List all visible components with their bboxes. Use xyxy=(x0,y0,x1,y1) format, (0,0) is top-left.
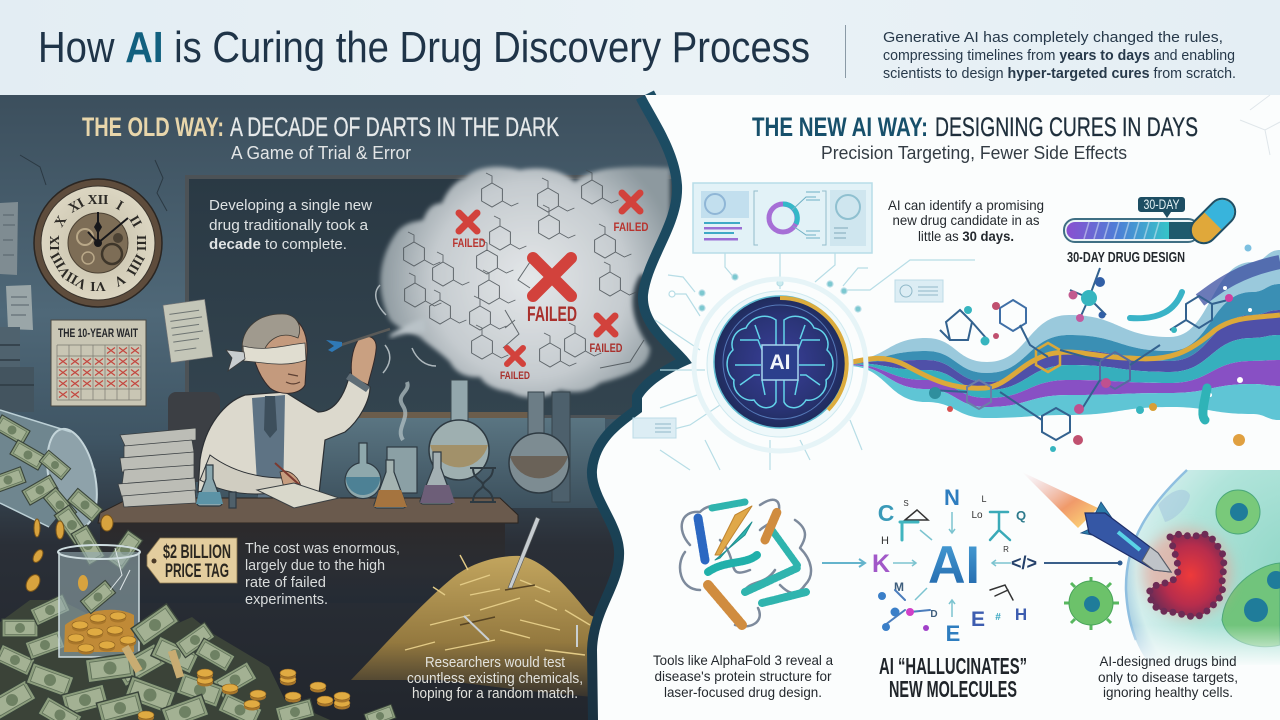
text: alphafold: laser-focused drug design. xyxy=(664,684,822,700)
text: random search: countless existing chemicals, xyxy=(407,671,583,687)
text: targeted binding xyxy=(1098,653,1238,700)
panel: the old way xyxy=(0,95,700,720)
text: a decade to develop xyxy=(209,197,372,253)
icon: wall clock: IIII xyxy=(123,251,147,277)
panel: the new AI way xyxy=(597,95,1280,720)
heading: the new AI way: THE NEW AI WAY: xyxy=(752,112,928,142)
flasks and pipes behind desk xyxy=(401,380,570,502)
progress bar: 30-day drug design: 30-DAY DRUG DESIGN xyxy=(1067,249,1185,266)
molecule nodes xyxy=(929,244,1252,452)
generative AI letter cloud: # xyxy=(995,612,1001,623)
diseased target protein xyxy=(1150,534,1224,616)
chemical structures xyxy=(404,170,644,368)
icon: wall clock: VII xyxy=(64,268,90,292)
subheading: trial and error: A Game of Trial & Error xyxy=(231,143,411,163)
failed marker large xyxy=(527,258,577,326)
dashboard xyxy=(693,183,872,253)
generative AI letter cloud: AI xyxy=(928,536,980,595)
text: random search xyxy=(407,655,583,702)
icon: wall clock: I xyxy=(113,198,125,214)
heading: the old way: THE OLD WAY: xyxy=(82,112,224,142)
text: targeted binding: ignoring healthy cells. xyxy=(1103,684,1233,700)
text: a decade to develop: decade to complete. xyxy=(209,236,347,253)
icon: wall clock: VIII xyxy=(48,249,74,279)
subheading: precision targeting: Precision Targeting, Fewer Side Effects xyxy=(821,143,1127,163)
circuit lines xyxy=(650,253,975,470)
inner arrows xyxy=(893,512,1011,617)
text: random search: hoping for a random match. xyxy=(412,686,578,702)
notepad xyxy=(257,483,339,508)
failed marker 1: FAILED xyxy=(452,236,486,250)
failed marker 4 xyxy=(590,316,623,355)
wall papers xyxy=(0,202,213,363)
icon: wall clock: XI xyxy=(66,196,87,217)
icon: capsule xyxy=(1185,193,1241,249)
healthy cells xyxy=(1216,490,1280,647)
icon: 30-day tag xyxy=(1138,197,1185,218)
icon: drug rocket xyxy=(1022,472,1171,572)
text: enormous cost: largely due to the high xyxy=(245,557,385,574)
chip: AI xyxy=(762,345,798,380)
generative AI letter cloud: E xyxy=(946,621,960,646)
text: alphafold xyxy=(653,652,833,700)
filing cabinet xyxy=(0,327,34,412)
paper stacks xyxy=(118,428,196,507)
icon: wall clock: III xyxy=(133,235,148,251)
small flasks xyxy=(196,443,496,508)
generative AI letter cloud: H xyxy=(1015,605,1027,624)
text: targeted binding: only to disease targets, xyxy=(1098,669,1238,685)
icon: 30-day tag: 30-DAY xyxy=(1144,197,1180,212)
generative AI letter cloud: C xyxy=(878,500,894,526)
generative AI letter cloud: H xyxy=(881,535,889,547)
smoke cloud of failed experiments xyxy=(376,167,670,398)
money pile xyxy=(0,594,330,720)
glass beaker with coins xyxy=(58,545,140,657)
molecular structures xyxy=(930,268,1228,440)
icon: wall clock: IX xyxy=(48,235,63,251)
generative AI letter cloud: E xyxy=(971,608,985,631)
calendar: the 10-year wait xyxy=(51,320,146,406)
desk with paper stacks and glassware xyxy=(98,428,518,603)
front money bundles and coins xyxy=(85,604,396,720)
icon: wall clock: V xyxy=(111,271,127,289)
failed marker 2: FAILED xyxy=(614,220,649,234)
scientist xyxy=(168,314,376,503)
header summary text: scientists to design hyper-targeted cures from scratch. xyxy=(883,66,1236,82)
arrow: AI to target xyxy=(1044,560,1122,566)
text: enormous cost: The cost was enormous, xyxy=(245,540,400,557)
failed marker 2 xyxy=(614,193,649,234)
generative AI letter cloud: D xyxy=(930,609,938,620)
tipped jar of money xyxy=(0,410,143,594)
text: enormous cost xyxy=(245,540,400,608)
header summary text xyxy=(883,30,1236,82)
virus-like healthy cell xyxy=(1064,577,1119,630)
header band xyxy=(0,0,1280,95)
generative AI letter cloud xyxy=(872,485,1037,646)
price tag: PRICE TAG xyxy=(165,561,229,582)
icon: wall clock: X xyxy=(52,214,70,230)
icon: dart xyxy=(326,329,390,352)
brain outline xyxy=(727,316,833,408)
text: thirty days: little as 30 days. xyxy=(918,228,1014,244)
heading: a decade of darts in the dark: A DECADE OF DARTS IN THE DARK xyxy=(230,112,559,142)
generative AI letter cloud: Q xyxy=(1016,508,1026,523)
heading: AI hallucinates: NEW MOLECULES xyxy=(889,676,1017,702)
price tag: $2 BILLION xyxy=(163,542,231,563)
text: alphafold: disease's protein structure for xyxy=(654,668,832,684)
text: alphafold: Tools like AlphaFold 3 reveal a xyxy=(653,652,833,668)
text: thirty days: new drug candidate in as xyxy=(892,212,1040,228)
generative AI letter cloud: K xyxy=(872,550,890,578)
failed marker 1 xyxy=(452,213,486,250)
calendar: the 10-year wait: THE 10-YEAR WAIT xyxy=(58,328,138,340)
header summary text: compressing timelines from years to days and enabling xyxy=(883,48,1235,64)
AI brain core xyxy=(694,279,866,451)
failed marker large: FAILED xyxy=(527,303,577,326)
text: targeted binding: AI-designed drugs bind xyxy=(1100,653,1236,669)
generative AI letter cloud: N xyxy=(944,485,960,510)
icon: wall clock xyxy=(34,179,162,307)
generative AI letter cloud: </> xyxy=(1011,553,1037,573)
generative AI letter cloud: M xyxy=(894,580,904,594)
failed marker 4: FAILED xyxy=(590,341,623,355)
heading: AI hallucinates: AI “HALLUCINATES” xyxy=(879,653,1027,679)
text: enormous cost: rate of failed xyxy=(245,574,326,591)
protein structure xyxy=(680,500,811,626)
icon: wall clock: XII xyxy=(87,193,109,208)
text: a decade to develop: drug traditionally took a xyxy=(209,217,369,234)
arrow: protein to AI xyxy=(822,559,865,567)
haystack with needle xyxy=(351,517,624,700)
text: thirty days xyxy=(888,197,1044,244)
icon: wall clock: VI xyxy=(90,278,106,293)
failed marker 5 xyxy=(500,348,530,382)
small data chips xyxy=(633,280,943,438)
progress bar: 30-day drug design xyxy=(1064,193,1241,266)
icon: wall clock: II xyxy=(126,213,144,230)
generative AI letter cloud: Lo xyxy=(971,510,983,521)
failed marker 5: FAILED xyxy=(500,370,530,382)
generative AI letter cloud: L xyxy=(981,494,987,504)
generative AI letter cloud: S xyxy=(903,499,909,508)
flowing molecular waves xyxy=(848,250,1280,420)
mini glyph shapes xyxy=(878,510,1013,631)
title: How AI is Curing the Drug Discovery Process xyxy=(38,23,810,72)
generative AI letter cloud: R xyxy=(1003,545,1009,554)
price tag xyxy=(147,538,237,583)
text: thirty days: AI can identify a promising xyxy=(888,197,1044,213)
target cell xyxy=(1022,470,1280,667)
heading: AI hallucinates xyxy=(879,653,1027,702)
text: enormous cost: experiments. xyxy=(245,591,328,608)
chip: AI: AI xyxy=(770,351,790,374)
text: a decade to develop: Developing a single new xyxy=(209,197,372,214)
header summary text: Generative AI has completely changed the rules, xyxy=(883,30,1223,46)
text: random search: Researchers would test xyxy=(425,655,565,671)
blackboard xyxy=(185,177,687,508)
